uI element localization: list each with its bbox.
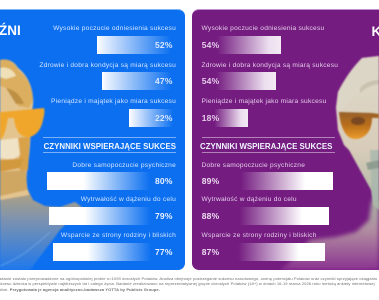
footnote text: online. Przygotowała je agencja analityczno-badawcza YOTTA by Publicis Groupe. <box>0 287 160 292</box>
label: wytrwałość: Wytrwałość w dążeniu do celu <box>81 196 176 203</box>
value: 79%: 79% <box>155 210 173 220</box>
bar: 79% <box>49 206 176 224</box>
label: samopoczucie: Dobre samopoczucie psychiczne <box>72 162 176 169</box>
bar: 77% <box>53 243 176 261</box>
rule bottom right <box>202 151 335 154</box>
value: 47%: 47% <box>155 76 173 86</box>
footnote text <box>0 276 377 292</box>
bar: 87% <box>201 243 325 261</box>
value: 18%: 18% <box>202 113 219 123</box>
footnote text: sukcesu dziecka w perspektywie najbliższych lat i całego życia. Badanie zrealizowano na reprezentatywnej grupie dorosłych Polaków (18+) w dniach 16-19 marca 2026 roku metodą ankiety internetowej <box>0 281 375 286</box>
value: 87%: 87% <box>202 247 219 257</box>
bar: 54% <box>201 36 281 54</box>
value: 54%: 54% <box>202 40 219 50</box>
rule top right <box>202 136 335 139</box>
bar: 54% second <box>201 72 276 90</box>
label: zdrowie: Zdrowie i dobra kondycja są miarą sukcesu <box>39 62 176 69</box>
bar: 89% <box>201 172 333 190</box>
label: wysokie poczucie: Wysokie poczucie odniesienia sukcesu <box>53 25 176 32</box>
label: zdrowie: Zdrowie i dobra kondycja są miarą sukcesu <box>202 62 338 69</box>
value: 80%: 80% <box>155 176 173 186</box>
rule bottom left <box>43 151 176 154</box>
right column: supporting factors <box>202 162 333 261</box>
label: pieniądze: Pieniądze i majątek jako miara sukcesu <box>202 98 326 105</box>
value: 89%: 89% <box>202 176 219 186</box>
footnote text: Badanie zostało przeprowadzone na ogólnopolskiej próbie n=1090 dorosłych Polaków. Analiza obejmuje postrzeganie sukcesu narodowego, ocenę potencjału Polaków oraz czynniki sprzyjające osiąganiu <box>0 276 377 281</box>
rule top left <box>43 136 176 139</box>
statue: left golden head with sunglasses <box>0 59 82 270</box>
value: 77%: 77% <box>155 247 173 257</box>
bar: 52% <box>97 36 176 54</box>
heading: right factors: CZYNNIKI WSPIERAJĄCE SUKCES <box>200 142 332 150</box>
value: 22%: 22% <box>155 113 173 123</box>
label: wytrwałość: Wytrwałość w dążeniu do celu <box>202 196 297 203</box>
value: 52%: 52% <box>155 40 173 50</box>
label: wsparcie: Wsparcie ze strony rodziny i bliskich <box>202 232 317 239</box>
bar: 88% <box>201 206 329 224</box>
statue: right pale head with amber sunglasses <box>280 56 379 270</box>
statue illustrations <box>0 55 379 270</box>
value: 54% second: 54% <box>202 76 219 86</box>
right column: measures of success <box>202 25 338 127</box>
bar: 18% <box>201 109 248 127</box>
bar: 47% <box>102 72 176 90</box>
bar: 80% <box>47 172 176 190</box>
label: wysokie poczucie: Wysokie poczucie odniesienia sukcesu <box>202 25 324 32</box>
panel: left blue panel <box>0 9 185 270</box>
label: pieniądze: Pieniądze i majątek jako miara sukcesu <box>51 98 176 105</box>
label: samopoczucie: Dobre samopoczucie psychiczne <box>202 162 305 169</box>
panel: right purple panel <box>192 9 379 270</box>
heading: left factors: CZYNNIKI WSPIERAJĄCE SUKCES <box>44 142 176 150</box>
left column: measures of success <box>39 25 176 127</box>
bar: 22% <box>129 109 176 127</box>
left column: supporting factors <box>47 162 176 261</box>
label: wsparcie: Wsparcie ze strony rodziny i bliskich <box>61 232 176 239</box>
value: 88%: 88% <box>202 210 219 220</box>
